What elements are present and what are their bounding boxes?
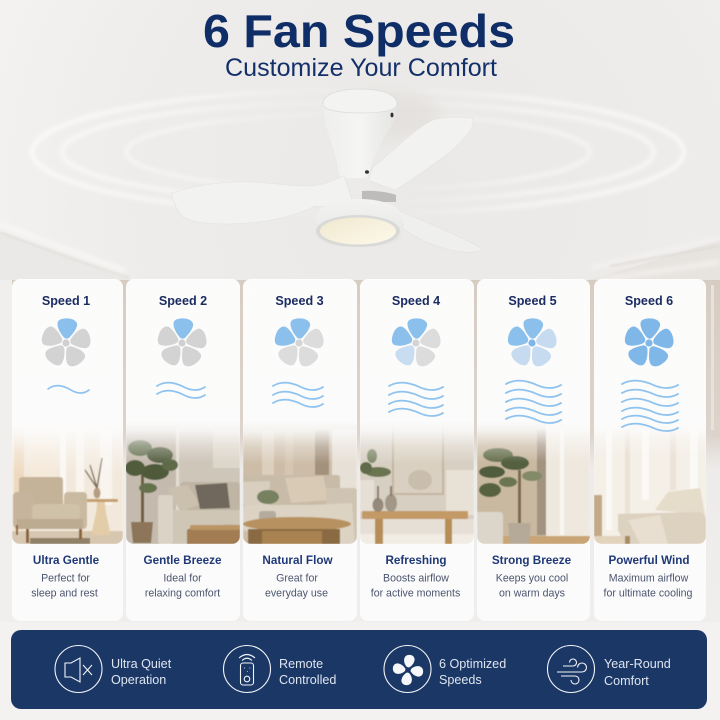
mode name: Refreshing <box>385 554 447 567</box>
description <box>144 554 222 600</box>
mode name: Powerful Wind <box>608 554 690 567</box>
mode name: Natural Flow <box>262 554 333 567</box>
panel: speed 3 <box>243 279 357 621</box>
ceiling fan <box>172 89 482 252</box>
heading: Speed 3 <box>275 294 324 308</box>
heading: Speed 6 <box>625 294 673 308</box>
room photo: potted tree and curtains <box>477 420 590 544</box>
card background <box>594 279 706 621</box>
icon: wind <box>548 646 594 692</box>
fan blade: upper right <box>368 117 473 190</box>
room photo: sofa with plant <box>125 420 240 544</box>
icon: remote control <box>224 646 270 692</box>
panel: speed 2 <box>125 279 240 621</box>
mode text: Maximum airflow <box>609 572 689 584</box>
card background <box>360 279 474 621</box>
description <box>262 554 333 600</box>
mode text: Great for <box>276 572 318 584</box>
description <box>604 554 693 600</box>
light drum <box>316 199 402 247</box>
icon: pinwheel fan <box>384 646 431 692</box>
lamp rim <box>316 215 400 247</box>
panel: speed 6 <box>594 279 706 621</box>
air-flow rings on ceiling <box>32 90 684 214</box>
mode text: Boosts airflow <box>383 572 449 584</box>
fan stem <box>340 178 370 206</box>
motor shadow band <box>362 191 396 202</box>
mode name: Gentle Breeze <box>144 554 222 567</box>
icon: fan one blade active <box>40 318 93 369</box>
icon: one air wave <box>48 386 89 393</box>
label: Ultra Quiet <box>111 657 172 671</box>
label: Remote <box>279 657 323 671</box>
fan motor body <box>323 104 397 188</box>
card background <box>243 279 357 621</box>
mode text second line: relaxing comfort <box>145 588 220 600</box>
feature: ultra quiet <box>55 646 172 692</box>
room photo: sectional with coffee table <box>243 420 357 544</box>
description <box>31 554 100 600</box>
room photo: console table <box>360 420 474 544</box>
icon: fan three blades active <box>390 318 443 369</box>
heading: Speed 4 <box>392 294 440 308</box>
icon: fan all blades active <box>623 318 676 369</box>
banner background <box>11 630 707 709</box>
heading: Speed 1 <box>42 294 90 308</box>
description <box>492 554 572 600</box>
label second line: Speeds <box>439 673 482 687</box>
card background <box>477 279 590 621</box>
feature: speeds <box>384 646 506 692</box>
fan blade: lower right <box>400 211 482 252</box>
card background <box>126 279 240 621</box>
mode text second line: for active moments <box>371 588 460 600</box>
fan blade: left <box>172 176 354 224</box>
heading: Speed 5 <box>508 294 557 308</box>
title: 6 Fan Speeds <box>203 5 515 57</box>
mount screw <box>390 113 394 117</box>
mode text: Ideal for <box>163 572 202 584</box>
ceiling mount <box>323 89 397 113</box>
blade screw <box>365 170 369 174</box>
label: 6 Optimized <box>439 657 506 671</box>
mode name: Ultra Gentle <box>33 554 100 567</box>
label second line: Comfort <box>604 674 649 688</box>
room photo: armchair <box>12 434 123 544</box>
mode text second line: on warm days <box>499 588 565 600</box>
feature: remote <box>224 646 336 692</box>
panel: speed 4 <box>360 279 474 621</box>
room photo: daybed and sheer curtains <box>594 420 706 544</box>
icon: fan five blades mostly active <box>506 318 559 369</box>
icon: five air waves <box>506 381 561 423</box>
label second line: Operation <box>111 673 166 687</box>
mode text: Keeps you cool <box>496 572 568 584</box>
feature: comfort <box>548 646 671 692</box>
label second line: Controlled <box>279 673 336 687</box>
heading: Speed 2 <box>159 294 207 308</box>
mode text second line: for ultimate cooling <box>604 588 693 600</box>
panel: feature banner <box>11 630 707 709</box>
subtitle: Customize Your Comfort <box>225 54 497 82</box>
label: Year-Round <box>604 657 671 671</box>
mode name: Strong Breeze <box>492 554 572 567</box>
mode text second line: sleep and rest <box>31 588 98 600</box>
description <box>371 554 460 600</box>
panel: speed 1 <box>12 279 123 621</box>
icon: muted speaker <box>55 646 102 692</box>
icon: fan two blades active <box>273 318 326 369</box>
icon: four air waves <box>389 383 443 416</box>
icon: fan one blade active <box>156 318 209 369</box>
icon: three air waves <box>273 383 323 407</box>
panel: speed 5 <box>477 279 590 621</box>
mode text second line: everyday use <box>265 588 328 600</box>
mode text: Perfect for <box>41 572 90 584</box>
icon: six air waves <box>622 381 678 431</box>
card background <box>12 279 123 621</box>
lamp glow <box>320 218 396 244</box>
icon: two air waves <box>157 383 205 398</box>
